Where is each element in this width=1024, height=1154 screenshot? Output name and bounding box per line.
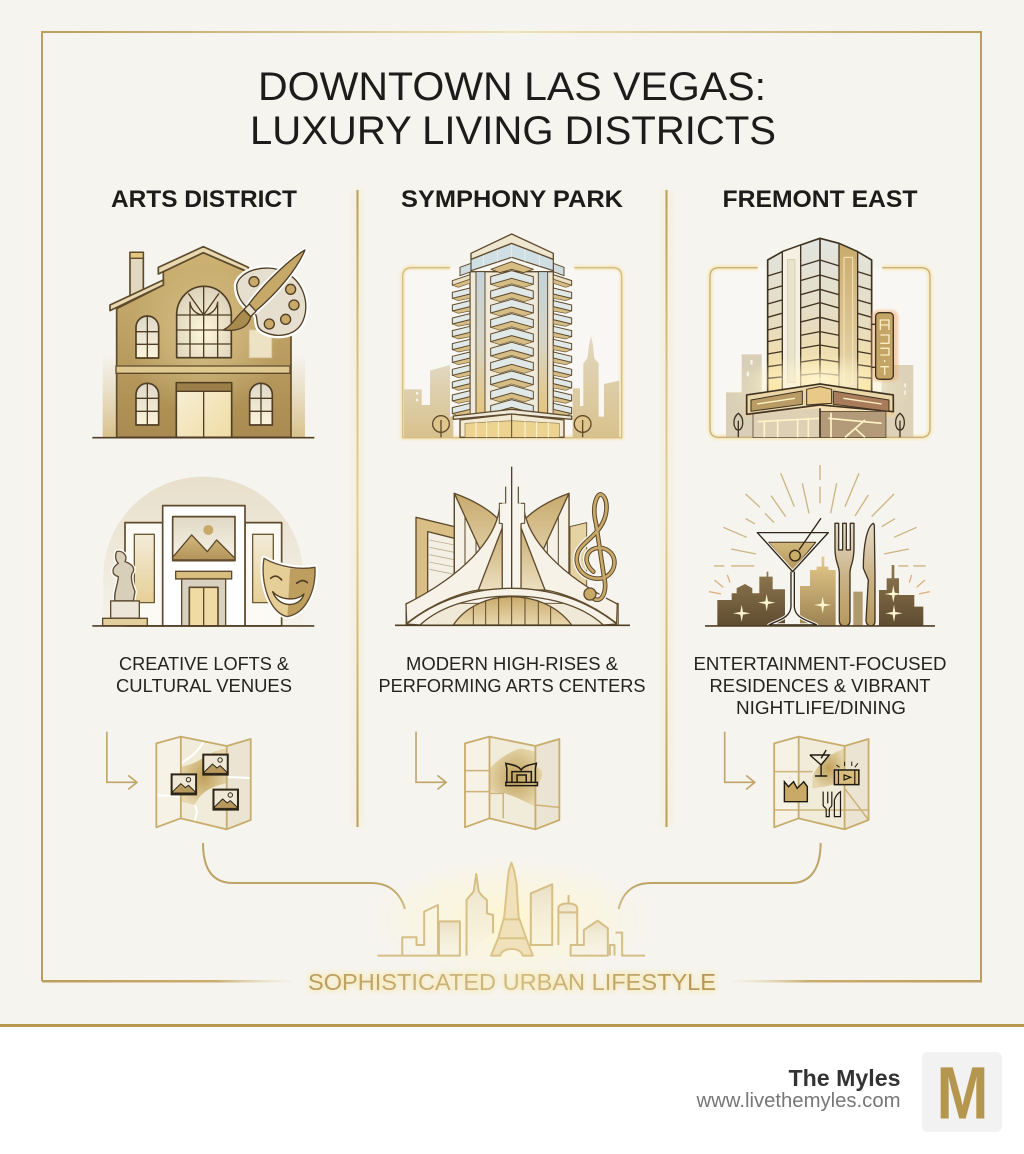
text: Fremont East description: NIGHTLIFE/DINING [736, 697, 906, 718]
text: Fremont East description: ENTERTAINMENT-FOCUSED [694, 653, 946, 674]
icon: glowing city skyline with tower [363, 857, 659, 983]
text: Arts District description: CREATIVE LOFTS & [119, 653, 290, 674]
heading: Symphony Park: SYMPHONY PARK [401, 186, 624, 213]
footer logo: M [936, 1052, 988, 1134]
icon: Arts District map [156, 737, 251, 829]
icon: Fremont East map [774, 737, 869, 829]
text: Symphony Park description: MODERN HIGH-RISES & [406, 653, 619, 674]
icon: Fremont East neon tower [710, 238, 930, 437]
tagline: SOPHISTICATED URBAN LIFESTYLE [308, 969, 716, 995]
column dividers [352, 190, 672, 827]
title: DOWNTOWN LAS VEGAS: [258, 65, 766, 109]
footer brand name: The Myles [788, 1065, 900, 1091]
footer website: www.livethemyles.com [695, 1090, 900, 1112]
icon: martini, cutlery and skyline [705, 465, 935, 626]
text: Fremont East description: RESIDENCES & VIBRANT [710, 675, 930, 696]
text: Fremont East description [694, 653, 946, 718]
arrow: Arts District to map [107, 732, 137, 789]
connector: left district to skyline [203, 843, 405, 909]
icon: Symphony Park high-rise tower [403, 234, 622, 438]
text: Arts District description [116, 653, 292, 696]
tagline: SOPHISTICATED URBAN LIFESTYLE [308, 969, 716, 995]
text: Arts District description: CULTURAL VENUES [116, 675, 292, 696]
connector: right district to skyline [619, 843, 821, 909]
icon: arts loft building with palette [92, 247, 314, 438]
text: Symphony Park description: PERFORMING ARTS CENTERS [378, 675, 646, 696]
decorative frame [42, 31, 982, 982]
heading: Fremont East: FREMONT EAST [722, 186, 918, 213]
icon: Symphony Park map [465, 737, 559, 829]
title [250, 65, 776, 153]
title: LUXURY LIVING DISTRICTS [250, 109, 776, 153]
text: Symphony Park description [378, 653, 646, 696]
icon: performing arts center with treble clef [395, 467, 630, 625]
arrow: Symphony Park to map [416, 732, 446, 789]
arrow: Fremont East to map [725, 732, 755, 789]
footer band [0, 1024, 1024, 1154]
icon: cultural venue gallery with statue and mask [92, 477, 315, 626]
heading: Arts District: ARTS DISTRICT [111, 186, 297, 213]
